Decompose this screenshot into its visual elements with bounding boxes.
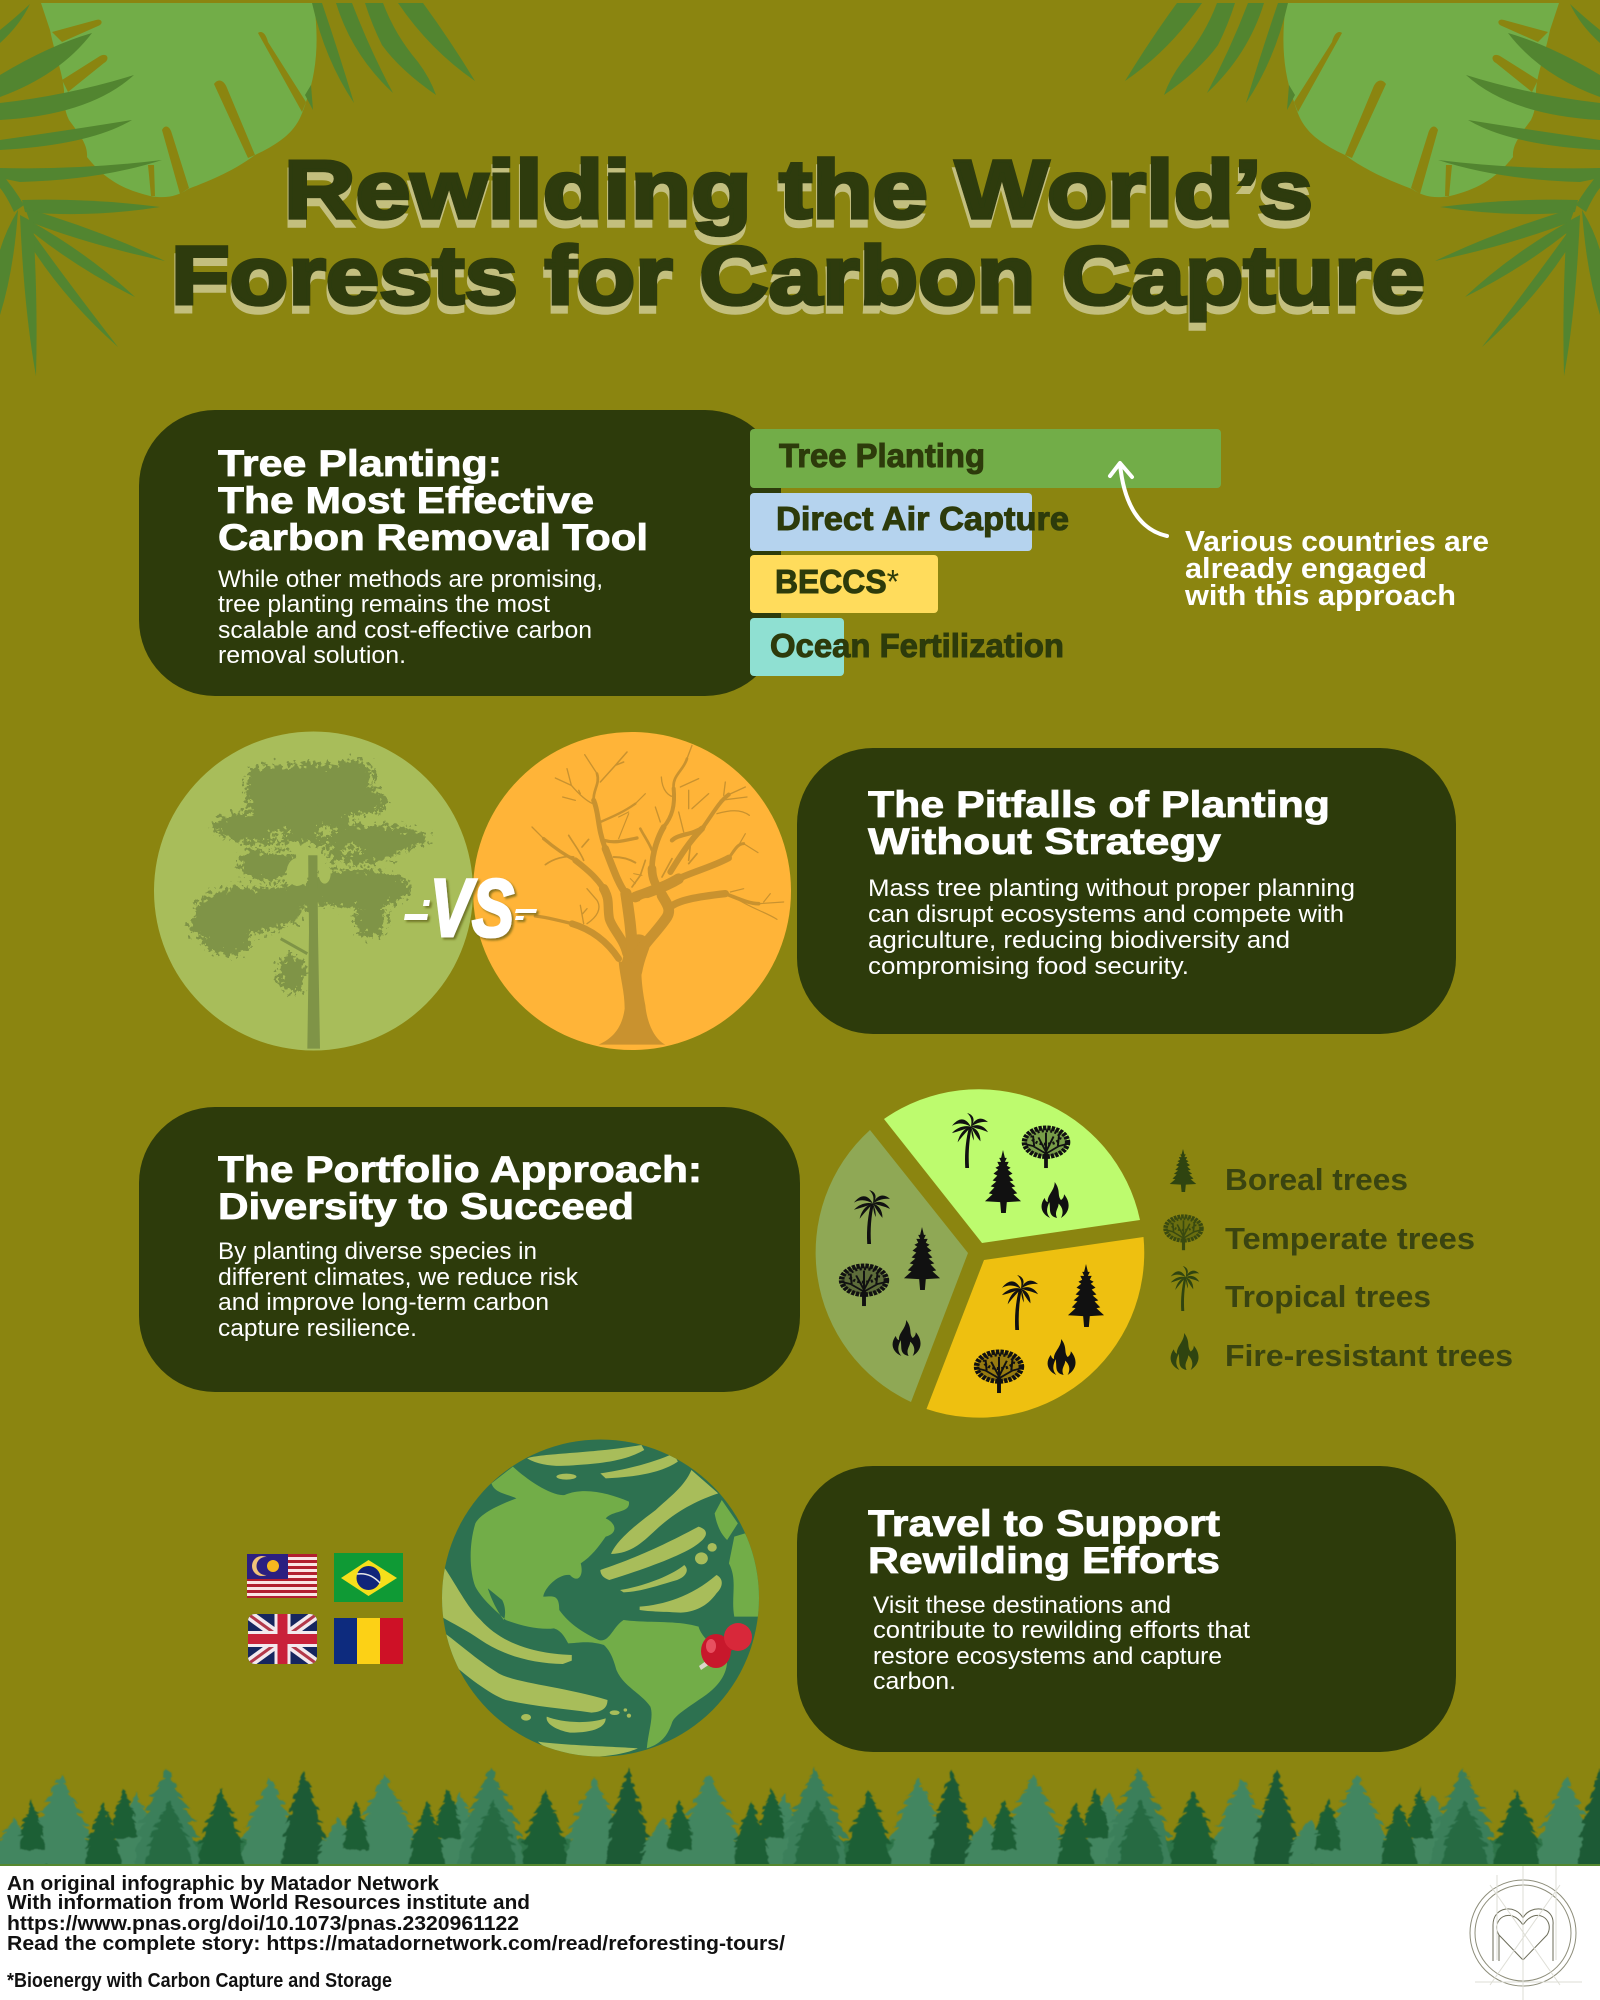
panel: pitfalls	[797, 748, 1456, 1034]
body text: travel	[873, 1592, 1250, 1695]
legend item: boreal	[1170, 1149, 1408, 1197]
callout: various countries: with this approach	[1184, 580, 1456, 612]
bar: direct air capture	[750, 493, 1069, 551]
top-left foliage	[0, 3, 475, 376]
arrow: to tree planting bar	[1110, 463, 1167, 536]
body text: pitfalls: can disrupt ecosystems and compete with	[868, 901, 1344, 928]
body text: travel: restore ecosystems and capture	[873, 1643, 1222, 1670]
bar chart: carbon removal methods	[750, 429, 1221, 676]
pie chart: tree portfolio	[816, 1089, 1144, 1418]
body text: tree planting: tree planting remains the most	[218, 591, 550, 618]
footer credits: An original infographic by Matador Network	[7, 1873, 440, 1895]
title: Forests for Carbon Capture	[171, 230, 1425, 322]
heading: travel: Rewilding Efforts	[868, 1540, 1220, 1581]
flags	[247, 1553, 403, 1664]
slice: olive	[816, 1130, 968, 1402]
callout: various countries	[1184, 526, 1489, 612]
right side land	[715, 1500, 761, 1617]
illustration: healthy tree circle	[154, 732, 473, 1050]
heading: portfolio approach: Diversity to Succeed	[218, 1186, 634, 1227]
flag: Brazil	[334, 1553, 403, 1602]
body text: travel: Visit these destinations and	[873, 1592, 1171, 1619]
body text: portfolio approach: and improve long-term carbon	[218, 1289, 549, 1316]
globe	[441, 1440, 761, 1757]
body text: pitfalls: compromising food security.	[868, 953, 1189, 980]
heading: tree planting: Tree Planting:	[218, 443, 502, 484]
legend item: temperate: Temperate trees	[1225, 1221, 1475, 1256]
heading: portfolio approach	[218, 1149, 702, 1227]
body text: travel: carbon.	[873, 1668, 956, 1695]
body text: portfolio approach: capture resilience.	[218, 1315, 417, 1342]
bar: BECCS: BECCS*	[775, 563, 899, 600]
footer credits: Read the complete story: https://matadornetwork.com/read/reforesting-tours/	[7, 1933, 785, 1955]
flag: Romania	[334, 1618, 403, 1664]
heading: pitfalls	[868, 784, 1330, 862]
slice: light green	[884, 1089, 1140, 1243]
bar: tree planting: Tree Planting	[779, 437, 985, 474]
legend item: boreal: Boreal trees	[1225, 1162, 1408, 1197]
flag: Malaysia	[247, 1554, 317, 1598]
body text: pitfalls: agriculture, reducing biodiversity and	[868, 927, 1290, 954]
legend item: tropical: Tropical trees	[1225, 1279, 1431, 1314]
panel: travel	[797, 1466, 1456, 1752]
footer credits: With information from World Resources institute and	[7, 1892, 530, 1914]
heading: tree planting: Carbon Removal Tool	[218, 517, 648, 558]
footer band	[0, 1866, 1600, 2000]
icon: red map pin	[699, 1623, 752, 1670]
heading: portfolio approach: The Portfolio Approach:	[218, 1149, 702, 1190]
body text: travel: contribute to rewilding efforts that	[873, 1617, 1250, 1644]
legend item: fire-resistant: Fire-resistant trees	[1225, 1338, 1513, 1373]
land masses	[471, 1467, 727, 1748]
callout: various countries: Various countries are	[1185, 526, 1489, 558]
callout: various countries: already engaged	[1185, 553, 1427, 585]
bar: ocean fertilization	[750, 618, 1064, 676]
heading: pitfalls: Without Strategy	[868, 821, 1221, 862]
body text: tree planting: scalable and cost-effective carbon	[218, 617, 592, 644]
bar: direct air capture: Direct Air Capture	[776, 500, 1069, 537]
title: Rewilding the World’s	[284, 144, 1313, 236]
panel: tree planting	[139, 410, 781, 696]
heading: tree planting: The Most Effective	[218, 480, 594, 521]
bar: ocean fertilization: Ocean Fertilization	[770, 627, 1064, 664]
logo: Matador Network	[1470, 1866, 1582, 2000]
legend item: temperate	[1166, 1216, 1475, 1256]
body text: pitfalls: Mass tree planting without proper planning	[868, 875, 1355, 902]
body text: tree planting: While other methods are promising,	[218, 566, 603, 593]
heading: travel	[868, 1503, 1220, 1581]
forest strip	[0, 1768, 1600, 1870]
heading: travel: Travel to Support	[868, 1503, 1220, 1544]
versus badge: VS	[430, 863, 514, 954]
slice: yellow	[926, 1237, 1144, 1418]
body text: portfolio approach: By planting diverse species in	[218, 1238, 537, 1265]
top-right foliage	[1125, 3, 1600, 376]
flag: United Kingdom	[248, 1614, 317, 1664]
body text: tree planting: removal solution.	[218, 642, 406, 669]
bar: BECCS	[750, 555, 938, 613]
footnote: *Bioenergy with Carbon Capture and Storage	[7, 1970, 392, 1992]
title	[171, 144, 1425, 322]
footer credits: https://www.pnas.org/doi/10.1073/pnas.2320961122	[7, 1913, 519, 1935]
bar: tree planting	[750, 429, 1221, 488]
pale green stripes	[441, 1445, 722, 1757]
heading: pitfalls: The Pitfalls of Planting	[868, 784, 1330, 825]
panel: portfolio approach	[139, 1107, 800, 1392]
legend: tree types	[1166, 1149, 1513, 1373]
illustration: dead tree circle	[473, 732, 791, 1050]
body text: pitfalls	[868, 875, 1355, 980]
body text: tree planting	[218, 566, 603, 669]
footer credits	[7, 1873, 785, 1955]
body text: portfolio approach: different climates, we reduce risk	[218, 1264, 579, 1291]
legend item: tropical	[1171, 1266, 1431, 1314]
body text: portfolio approach	[218, 1238, 579, 1342]
heading: tree planting	[218, 443, 648, 558]
